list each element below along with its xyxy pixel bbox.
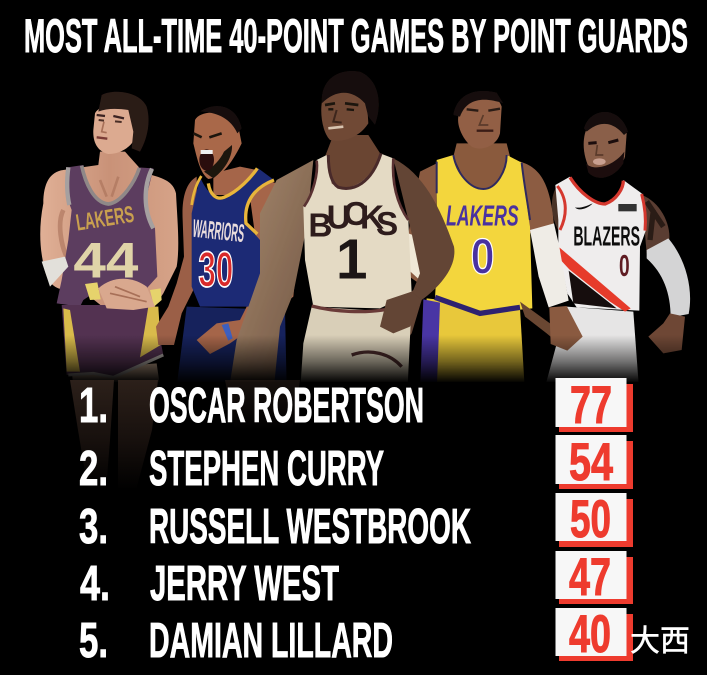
player: Stephen Curry [156, 106, 295, 387]
ranking row 3 [79, 500, 471, 554]
player: Damian Lillard: 0 [619, 249, 630, 283]
player: Stephen Curry: 30 [198, 242, 233, 298]
player: Damian Lillard [543, 112, 690, 393]
score badge: 77: 77 [570, 376, 612, 435]
jersey text: BUCKS 1: BUCKS [308, 196, 398, 245]
ranking row 1 [79, 379, 424, 433]
ranking row 5: DAMIAN LILLARD [149, 614, 393, 668]
ranking row 4 [80, 557, 339, 611]
ranking row 5 [79, 614, 393, 668]
photo cut-off mask [0, 382, 707, 402]
ranking row 1: OSCAR ROBERTSON [149, 379, 424, 433]
ranking row 2: 2. [79, 442, 108, 496]
score badge: 47: 47 [569, 548, 611, 607]
ranking row 2 [79, 442, 384, 496]
player: Russell Westbrook: 0 [471, 228, 495, 284]
jersey text: LAKERS 0: LAKERS [446, 200, 519, 232]
ranking row 1: 1. [79, 379, 108, 433]
score badge: 40: 40 [569, 605, 611, 664]
ranking row 4: 4. [80, 557, 110, 611]
ranking row 3: 3. [79, 500, 108, 554]
player: Oscar Robertson [228, 71, 454, 393]
jersey text: LAKERS 44: LAKERS [74, 201, 136, 236]
player: Russell Westbrook [405, 91, 583, 393]
ranking row 2: STEPHEN CURRY [149, 442, 384, 496]
score badge: 50: 50 [570, 490, 611, 549]
player: Stephen Curry: WARRIORS [191, 215, 246, 248]
player: Jerry West: 44 [73, 232, 139, 288]
players photo group [0, 71, 707, 490]
faint legs below the photo [70, 380, 300, 490]
photo fade to black [0, 335, 707, 383]
player: Jerry West [40, 92, 178, 387]
jersey text: BLAZERS 0: BLAZERS [573, 220, 640, 251]
player: Oscar Robertson: 1 [336, 228, 368, 291]
watermark: 大西 [630, 616, 690, 660]
ranking row 4: JERRY WEST [150, 557, 339, 611]
ranking row 5: 5. [79, 614, 108, 668]
ranking row 3: RUSSELL WESTBROOK [149, 500, 471, 554]
score badge: 54: 54 [569, 433, 613, 492]
